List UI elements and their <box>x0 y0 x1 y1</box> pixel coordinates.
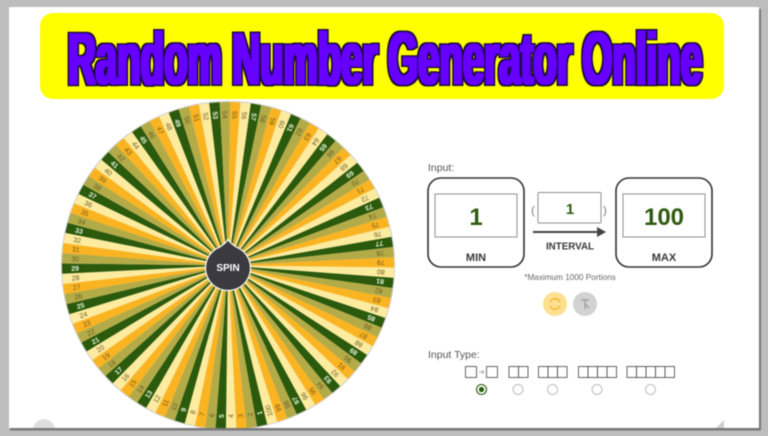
wheel sectors: 34 <box>77 218 86 227</box>
wheel sectors: 1 <box>257 410 264 415</box>
min box: 1 <box>469 204 483 231</box>
wheel sectors: 8 <box>190 410 198 415</box>
wheel sectors: 52 <box>201 112 209 121</box>
wheel sectors: 77 <box>375 239 384 247</box>
wheel sectors: 78 <box>376 248 385 256</box>
wheel sectors: 16 <box>121 373 131 383</box>
wheel sectors: 14 <box>136 384 146 395</box>
wheel sectors: 13 <box>144 390 154 400</box>
wheel sectors: 58 <box>258 114 267 123</box>
wheel sectors: 81 <box>376 277 384 284</box>
wheel rim <box>61 101 395 430</box>
refresh button <box>543 292 567 316</box>
wheel sectors: 62 <box>293 127 303 137</box>
wheel sectors: 84 <box>370 304 379 313</box>
wheel sectors: 19 <box>101 352 112 362</box>
spin button <box>206 239 251 291</box>
wheel sectors: 17 <box>114 366 124 377</box>
wheel sectors: 55 <box>230 111 237 119</box>
max box: MAX <box>652 252 677 264</box>
wheel sectors: 100 <box>265 404 275 417</box>
wheel sectors: 67 <box>332 154 342 165</box>
input type heading: Input Type: <box>428 349 480 361</box>
wheel sectors: 28 <box>71 275 80 283</box>
wheel sectors: 91 <box>337 361 347 371</box>
input type options <box>466 366 674 394</box>
wheel sectors: 2 <box>247 412 255 417</box>
interval control: INTERVAL <box>546 242 594 252</box>
wheel sectors: 74 <box>367 211 377 220</box>
wheel sectors: 20 <box>96 344 106 354</box>
wheel sectors: 80 <box>377 268 385 275</box>
maximum portions note: *Maximum 1000 Portions <box>524 273 616 282</box>
corner undo button <box>33 419 55 428</box>
interval control <box>531 192 607 252</box>
wheel sectors: 54 <box>221 111 228 119</box>
wheel sectors: 21 <box>91 336 101 346</box>
wheel sectors: 51 <box>191 114 200 123</box>
wheel sectors: 3 <box>238 413 245 418</box>
wheel sectors: 4 <box>228 414 235 418</box>
wheel sectors: 99 <box>274 403 284 412</box>
interval control: ( <box>531 205 535 217</box>
wheel sectors: 29 <box>71 266 79 273</box>
max box <box>616 178 712 267</box>
wheel sectors: 50 <box>182 116 191 125</box>
reset button <box>573 292 597 316</box>
wheel sectors: 70 <box>350 177 360 187</box>
wheel sectors: 94 <box>316 380 326 390</box>
wheel sectors: 72 <box>360 193 370 203</box>
wheel sectors: 89 <box>349 346 359 356</box>
wheel sectors: 60 <box>276 119 285 129</box>
option: four digits <box>578 366 616 394</box>
wheel sectors: 26 <box>74 293 83 302</box>
wheel sectors: 65 <box>317 142 328 152</box>
corner triangle <box>716 420 724 428</box>
wheel sectors: 23 <box>82 320 92 329</box>
wheel sectors: 32 <box>73 237 82 245</box>
wheel sectors: 38 <box>92 183 102 193</box>
wheel sectors: 57 <box>249 112 257 121</box>
interval control: 1 <box>566 201 574 218</box>
wheel sectors: 71 <box>355 185 365 195</box>
wheel sectors: 93 <box>323 374 334 384</box>
option: sequence <box>466 366 498 394</box>
wheel sectors: 22 <box>86 328 96 338</box>
wheel sectors: 98 <box>283 399 293 409</box>
wheel sectors: 7 <box>199 412 207 417</box>
wheel sectors: 49 <box>172 119 182 128</box>
wheel sectors: 75 <box>370 220 380 229</box>
title banner <box>40 13 724 99</box>
wheel sectors: 53 <box>211 111 218 120</box>
wheel sectors: 40 <box>102 167 113 178</box>
wheel sectors: 30 <box>71 256 79 263</box>
wheel sectors: 96 <box>300 391 310 401</box>
wheel sectors: 35 <box>79 209 89 218</box>
wheel sectors: 37 <box>87 191 97 201</box>
wheel sectors: 42 <box>115 153 126 164</box>
wheel sectors: 56 <box>239 111 247 120</box>
wheel sectors: 25 <box>76 302 86 311</box>
min box: MIN <box>466 252 486 264</box>
min box <box>428 178 524 267</box>
wheel sectors: 59 <box>267 116 276 126</box>
wheel sectors: 9 <box>180 407 188 413</box>
wheel sectors: 47 <box>154 126 164 136</box>
option: five digits <box>627 366 674 394</box>
wheel sectors: 36 <box>83 200 93 210</box>
wheel sectors: 64 <box>310 136 320 147</box>
wheel sectors: 18 <box>107 359 118 370</box>
wheel sectors: 39 <box>97 175 107 185</box>
wheel sectors: 31 <box>72 247 80 254</box>
wheel sectors: 82 <box>374 286 383 294</box>
wheel sectors: 97 <box>292 395 302 405</box>
wheel sectors: 68 <box>338 161 349 172</box>
wheel sectors: 86 <box>363 321 373 331</box>
wheel sectors: 41 <box>109 160 119 170</box>
spin button: SPIN <box>216 263 240 274</box>
wheel sectors: 73 <box>364 202 374 211</box>
wheel sectors: 15 <box>128 379 139 389</box>
wheel sectors: 95 <box>308 385 318 396</box>
wheel sectors: 12 <box>153 394 163 404</box>
wheel sectors <box>61 101 395 429</box>
wheel sectors: 43 <box>122 147 133 157</box>
wheel sectors: 92 <box>330 367 341 378</box>
max box: 100 <box>644 204 684 231</box>
wheel sectors: 46 <box>146 130 156 140</box>
input heading: Input: <box>428 162 454 174</box>
wheel sectors: 66 <box>325 148 335 158</box>
option: two digits <box>509 366 528 394</box>
wheel sectors: 10 <box>171 402 180 412</box>
wheel sectors: 79 <box>377 258 385 265</box>
option: three digits <box>538 366 567 394</box>
wheel sectors: 33 <box>74 227 84 236</box>
wheel sectors: 44 <box>130 141 140 151</box>
wheel sectors: 85 <box>367 313 377 322</box>
wheel sectors: 48 <box>163 122 173 132</box>
wheel sectors: 61 <box>285 123 294 133</box>
wheel sectors: 76 <box>373 229 382 238</box>
spin wheel <box>60 100 396 429</box>
wheel sectors: 88 <box>354 338 364 348</box>
wheel sectors: 6 <box>209 413 216 418</box>
wheel sectors: 24 <box>79 311 89 320</box>
wheel sectors: 11 <box>162 399 171 408</box>
interval control: ) <box>603 205 607 217</box>
wheel sectors: 5 <box>219 414 226 418</box>
wheel sectors: 83 <box>372 295 382 304</box>
wheel sectors: 63 <box>302 131 312 141</box>
wheel sectors: 69 <box>344 169 355 179</box>
wheel sectors: 90 <box>343 353 354 364</box>
wheel sectors: 27 <box>72 284 81 292</box>
wheel sectors: 45 <box>138 135 148 146</box>
wheel sectors: 87 <box>359 330 369 340</box>
